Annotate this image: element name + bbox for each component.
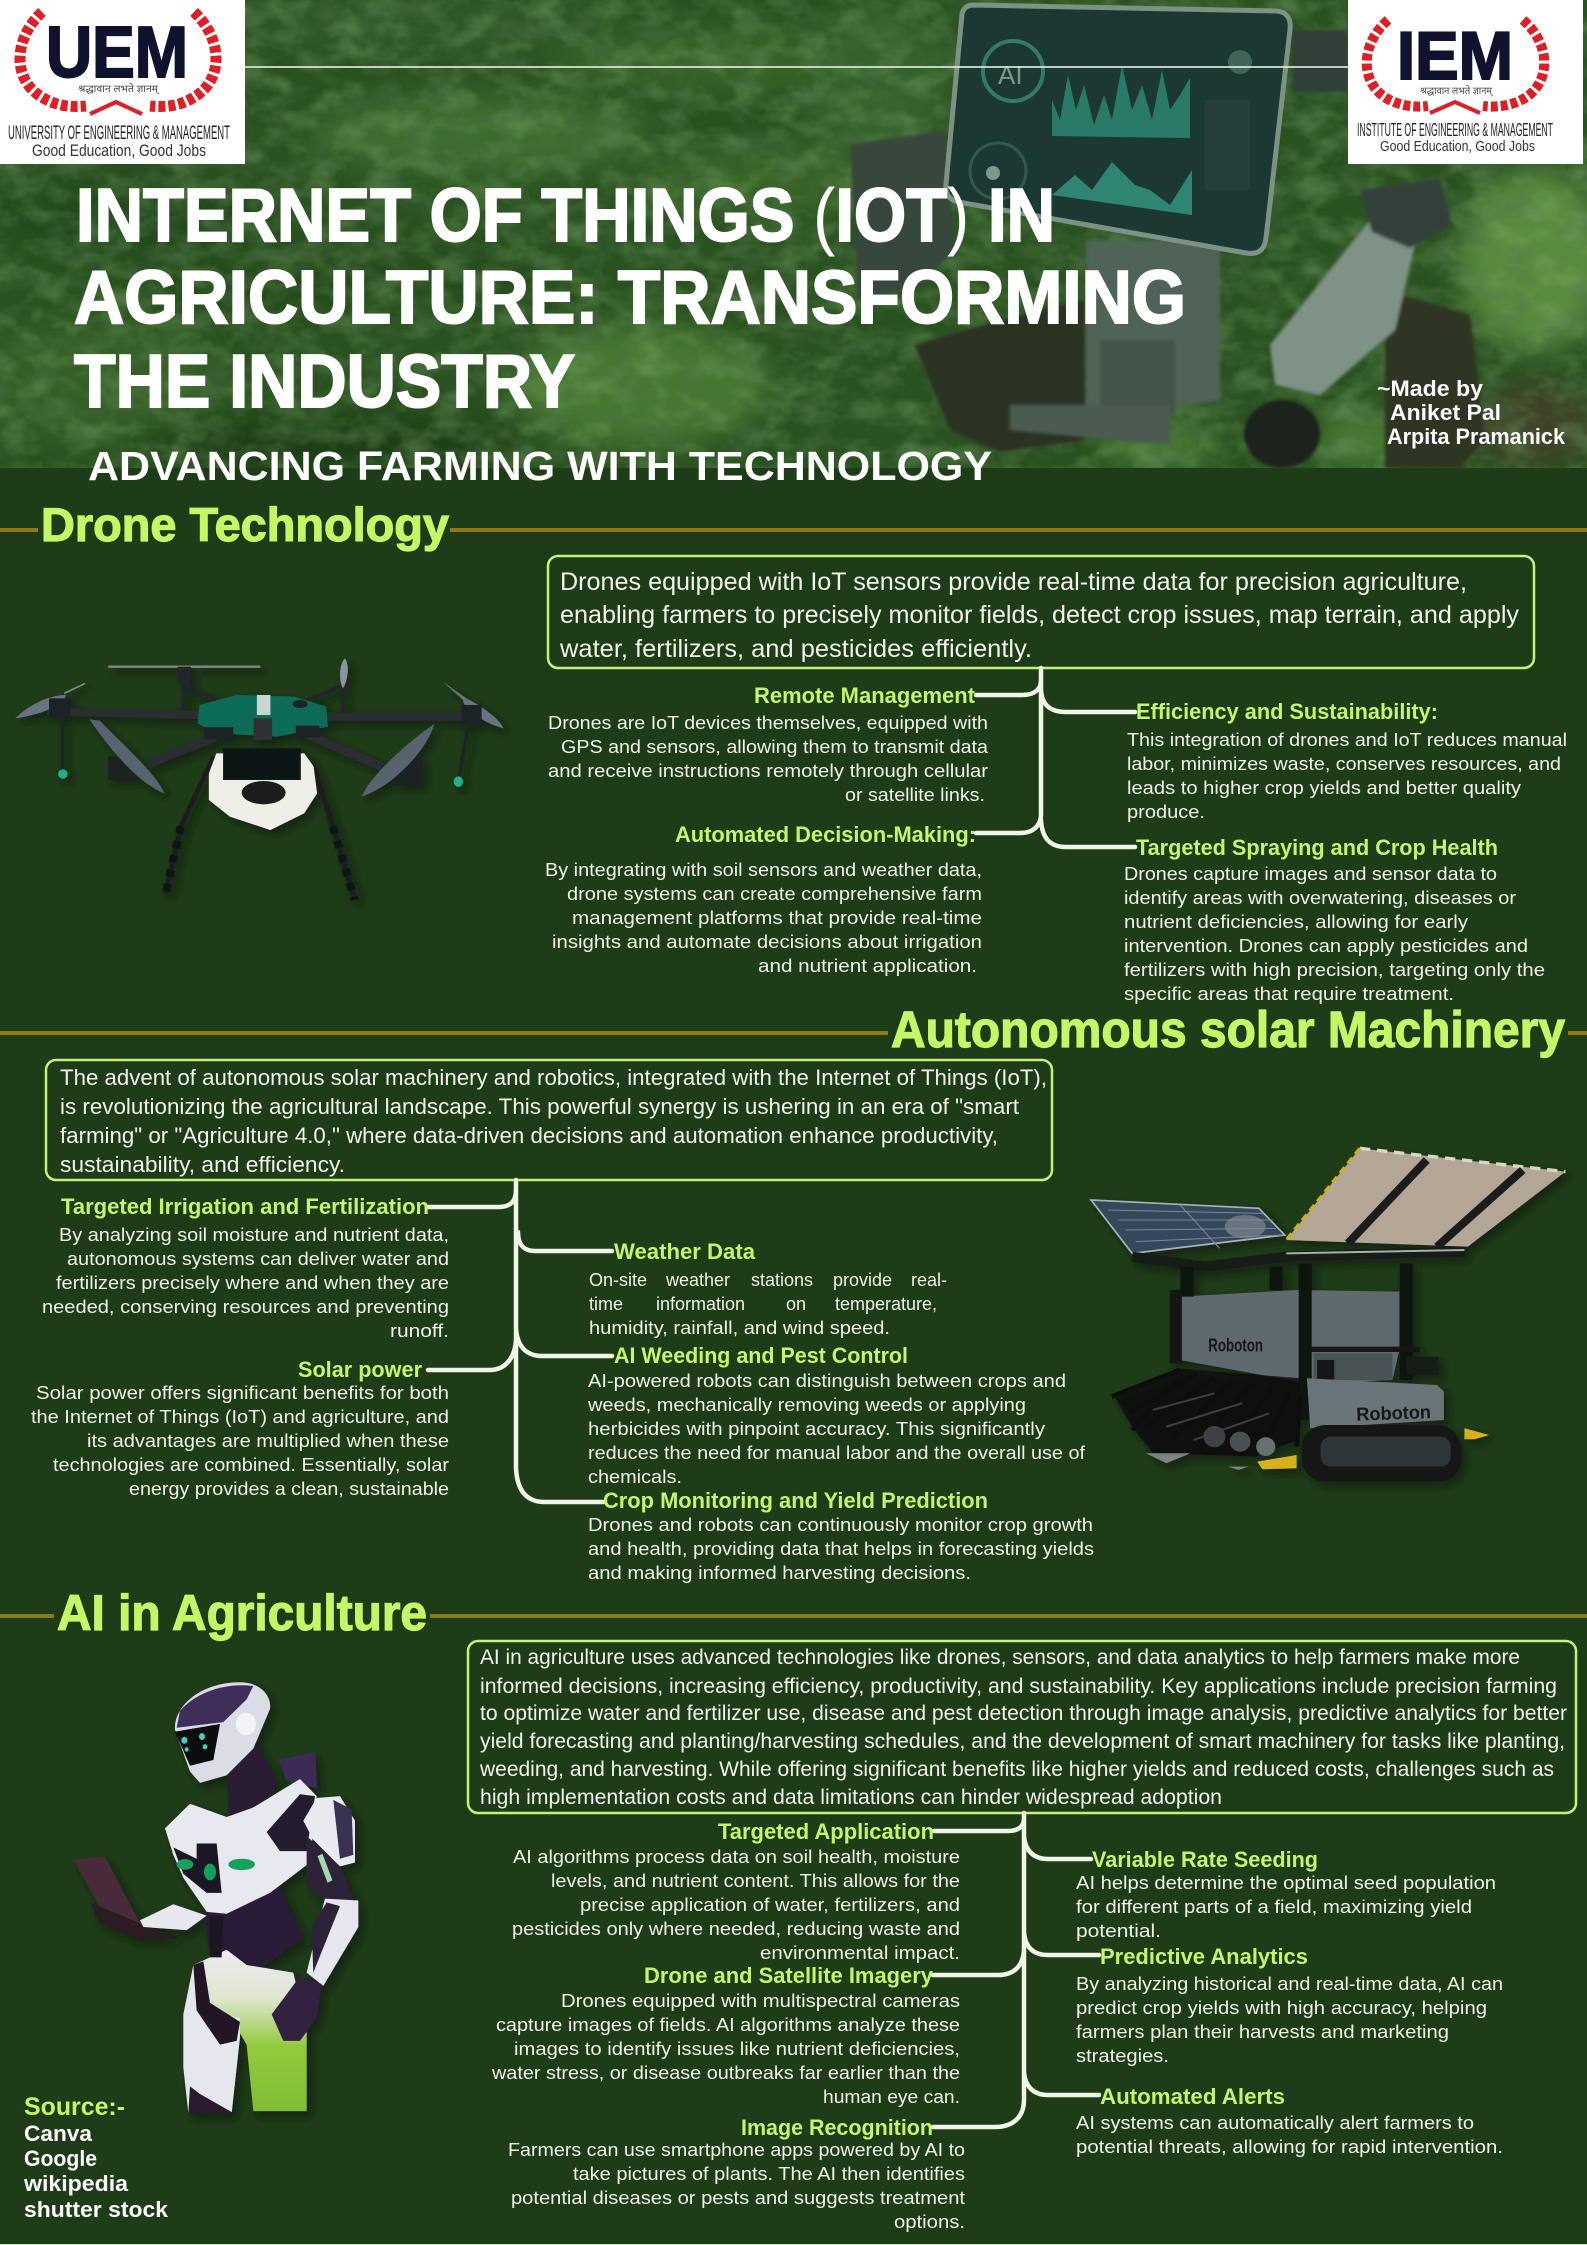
item: Variable Rate Seeding: for different parts of a field, maximizing yield <box>1076 1897 1472 1917</box>
item: Weather Data: humidity, rainfall, and wind speed. <box>589 1318 890 1338</box>
connector tree: autonomous <box>428 1180 612 1502</box>
section heading: Drone Technology: Drone Technology <box>41 498 449 551</box>
item: Targeted Application <box>512 1819 960 1963</box>
item: Predictive Analytics: farmers plan their harvests and marketing <box>1076 2022 1449 2042</box>
title <box>74 173 1186 423</box>
item: Targeted Application: precise application of water, fertilizers, and <box>580 1895 960 1915</box>
item: Variable Rate Seeding <box>1076 1847 1496 1941</box>
title: INTERNET OF THINGS (IOT) IN <box>76 173 1055 257</box>
item: Targeted Irrigation and Fertilization: autonomous systems can deliver water and <box>67 1249 449 1269</box>
panel: drone intro: enabling farmers to precisely monitor fields, detect crop issues, map terrain, and apply <box>560 601 1519 629</box>
item: Predictive Analytics: By analyzing historical and real-time data, AI can <box>1076 1974 1503 1994</box>
UEM logo: Good Education, Good Jobs <box>32 141 206 160</box>
item: Solar power: its advantages are multiplied when these <box>87 1431 449 1451</box>
item: AI Weeding and Pest Control: weeds, mechanically removing weeds or applying <box>587 1395 1026 1415</box>
item: Automated Decision-Making: Automated Decision-Making: <box>675 822 976 847</box>
item: Weather Data <box>589 1239 947 1338</box>
item: Automated Alerts: Automated Alerts <box>1100 2084 1285 2109</box>
item: Remote Management <box>548 683 989 805</box>
panel: AI intro <box>468 1641 1576 1813</box>
item: Targeted Spraying and Crop Health: intervention. Drones can apply pesticides and <box>1124 936 1528 956</box>
item: Predictive Analytics: Predictive Analytics <box>1100 1944 1308 1969</box>
IEM logo: Good Education, Good Jobs <box>1380 138 1535 155</box>
sources list: wikipedia <box>23 2171 129 2196</box>
item: Remote Management: GPS and sensors, allowing them to transmit data <box>561 737 989 757</box>
item: Targeted Spraying and Crop Health: nutrient deficiencies, allowing for early <box>1124 912 1468 932</box>
item: Automated Decision-Making: drone systems can create comprehensive farm <box>567 884 982 904</box>
item: Variable Rate Seeding: AI helps determine the optimal seed population <box>1076 1873 1496 1893</box>
connector tree: drone <box>976 668 1135 847</box>
item: AI Weeding and Pest Control: chemicals. <box>588 1467 682 1487</box>
item: Crop Monitoring and Yield Prediction: and health, providing data that helps in forecasting yields <box>588 1539 1094 1559</box>
item: Solar power <box>31 1357 449 1499</box>
authors credit <box>1377 376 1566 449</box>
item: Drone and Satellite Imagery: water stress, or disease outbreaks far earlier than the <box>491 2063 960 2083</box>
item: AI Weeding and Pest Control: AI-powered robots can distinguish between crops and <box>588 1371 1066 1391</box>
item: Automated Decision-Making: and nutrient application. <box>758 956 977 976</box>
decorative header line <box>245 66 1350 68</box>
item: Targeted Spraying and Crop Health: Targeted Spraying and Crop Health <box>1136 835 1498 860</box>
item: Targeted Spraying and Crop Health: fertilizers with high precision, targeting only the <box>1124 960 1545 980</box>
item: Solar power: Solar power <box>298 1357 422 1382</box>
item: Targeted Spraying and Crop Health: identify areas with overwatering, diseases or <box>1124 888 1516 908</box>
item: Targeted Application: AI algorithms process data on soil health, moisture <box>513 1847 960 1867</box>
item: Efficiency and Sustainability: Efficiency and Sustainability: <box>1136 699 1438 724</box>
IEM logo: श्रद्धावान लभते ज्ञानम् <box>1420 85 1494 97</box>
item: Image Recognition <box>508 2115 965 2232</box>
solar autonomous machine image: Roboton <box>1356 1402 1431 1426</box>
item: Solar power: Solar power offers significant benefits for both <box>36 1383 449 1403</box>
authors credit: Aniket Pal <box>1390 400 1501 425</box>
item: Efficiency and Sustainability: leads to higher crop yields and better quality <box>1127 778 1521 798</box>
item: Image Recognition: Farmers can use smartphone apps powered by AI to <box>508 2140 965 2160</box>
item: Weather Data: provide <box>833 1270 892 1290</box>
item: Predictive Analytics <box>1076 1944 1503 2066</box>
item: Targeted Application: Targeted Application <box>718 1819 934 1844</box>
item: Remote Management: and receive instructions remotely through cellular <box>548 761 988 781</box>
title: AGRICULTURE: TRANSFORMING <box>74 255 1186 339</box>
item: Automated Alerts: potential threats, allowing for rapid intervention. <box>1076 2137 1503 2157</box>
IEM logo <box>1348 0 1583 164</box>
item: Efficiency and Sustainability: produce. <box>1127 802 1205 822</box>
item: Targeted Irrigation and Fertilization <box>42 1194 449 1341</box>
item: Weather Data: real- <box>911 1270 947 1290</box>
item: Targeted Spraying and Crop Health: Drones capture images and sensor data to <box>1124 864 1497 884</box>
solar autonomous machine image <box>1091 1148 1565 1482</box>
item: AI Weeding and Pest Control <box>587 1343 1086 1487</box>
item: Targeted Irrigation and Fertilization: runoff. <box>390 1321 449 1341</box>
item: Targeted Application: levels, and nutrient content. This allows for the <box>551 1871 960 1891</box>
item: Solar power: technologies are combined. Essentially, solar <box>53 1455 449 1475</box>
item: Drone and Satellite Imagery: Drone and Satellite Imagery <box>644 1963 934 1988</box>
item: AI Weeding and Pest Control: AI Weeding and Pest Control <box>614 1343 908 1368</box>
sources list <box>23 2093 169 2222</box>
sources list: Canva <box>24 2121 93 2146</box>
item: Targeted Irrigation and Fertilization: By analyzing soil moisture and nutrient data, <box>59 1225 449 1245</box>
tablet dashboard in photo: AI <box>998 60 1023 90</box>
panel: AI intro: yield forecasting and planting/harvesting schedules, and the development of smart machinery for tasks like planting, <box>480 1730 1565 1753</box>
item: Targeted Application: environmental impact. <box>760 1943 960 1963</box>
item: Drone and Satellite Imagery: human eye can. <box>823 2087 960 2107</box>
panel: autonomous intro: is revolutionizing the agricultural landscape. This powerful synergy is ushering in an era of "smart <box>60 1094 1019 1119</box>
item: Targeted Application: pesticides only where needed, reducing waste and <box>512 1919 960 1939</box>
robot tracks and body in photo <box>850 30 1485 468</box>
item: AI Weeding and Pest Control: herbicides with pinpoint accuracy. This significantly <box>588 1419 1045 1439</box>
item: AI Weeding and Pest Control: reduces the need for manual labor and the overall use of <box>588 1443 1086 1463</box>
tablet dashboard in photo <box>946 5 1290 253</box>
panel: drone intro <box>548 556 1534 668</box>
item: Weather Data: Weather Data <box>614 1239 756 1264</box>
panel: AI intro: high implementation costs and data limitations can hinder widespread adoption <box>480 1786 1222 1809</box>
item: Weather Data: temperature, <box>835 1294 937 1314</box>
sources list: Source:- <box>24 2093 125 2121</box>
panel: autonomous intro: The advent of autonomous solar machinery and robotics, integrated with the Internet of Things (IoT), <box>60 1065 1047 1090</box>
panel: AI intro: informed decisions, increasing efficiency, productivity, and sustainability. Key applications include precision farming <box>480 1675 1557 1698</box>
sources list: shutter stock <box>24 2197 169 2222</box>
item: Weather Data: On-site <box>589 1270 647 1290</box>
title: THE INDUSTRY <box>74 339 575 423</box>
item: Targeted Irrigation and Fertilization: Targeted Irrigation and Fertilization <box>61 1194 429 1219</box>
panel: autonomous intro <box>46 1060 1052 1180</box>
item: Crop Monitoring and Yield Prediction: Drones and robots can continuously monitor crop growth <box>588 1515 1093 1535</box>
item: Variable Rate Seeding: potential. <box>1076 1921 1161 1941</box>
item: Crop Monitoring and Yield Prediction: Crop Monitoring and Yield Prediction <box>603 1488 988 1513</box>
item: Automated Decision-Making: By integrating with soil sensors and weather data, <box>545 860 982 880</box>
item: Image Recognition: potential diseases or pests and suggests treatment <box>511 2188 965 2208</box>
item: Automated Decision-Making <box>545 822 982 976</box>
UEM logo: UEM <box>46 13 188 93</box>
item: Efficiency and Sustainability: This integration of drones and IoT reduces manual <box>1127 730 1567 750</box>
section heading: AI in Agriculture: AI in Agriculture <box>57 1585 427 1641</box>
connector tree: AI <box>933 1813 1099 2127</box>
UEM logo <box>0 0 245 164</box>
authors credit: Arpita Pramanick <box>1387 424 1566 449</box>
item: Solar power: the Internet of Things (IoT) and agriculture, and <box>31 1407 449 1427</box>
item: Automated Alerts <box>1076 2084 1503 2157</box>
subtitle: ADVANCING FARMING WITH TECHNOLOGY <box>88 443 992 489</box>
item: Predictive Analytics: strategies. <box>1076 2046 1169 2066</box>
item: Remote Management: Remote Management <box>754 683 976 708</box>
item: Remote Management: Drones are IoT devices themselves, equipped with <box>548 713 988 733</box>
header photo: farm robot in lettuce field <box>0 0 1587 473</box>
item: Weather Data: weather <box>665 1270 730 1290</box>
panel: drone intro: water, fertilizers, and pesticides efficiently. <box>559 635 1032 663</box>
item: Targeted Irrigation and Fertilization: needed, conserving resources and preventing <box>42 1297 449 1317</box>
drone image <box>15 658 504 900</box>
item: Targeted Spraying and Crop Health: specific areas that require treatment. <box>1124 984 1454 1004</box>
IEM logo: IEM <box>1397 18 1513 94</box>
humanoid AI robot image <box>73 1682 358 2113</box>
item: Drone and Satellite Imagery: images to identify issues like nutrient deficiencies, <box>514 2039 960 2059</box>
item: Efficiency and Sustainability: labor, minimizes waste, conserves resources, and <box>1127 754 1561 774</box>
UEM logo: श्रद्धावान लभते ज्ञानम् <box>78 83 160 95</box>
panel: autonomous intro: farming" or "Agriculture 4.0," where data-driven decisions and automation enhance productivity, <box>60 1123 998 1148</box>
panel: AI intro: to optimize water and fertilizer use, disease and pest detection through image analysis, predictive analytics for better <box>480 1702 1567 1725</box>
panel: drone intro: Drones equipped with IoT sensors provide real-time data for precision agriculture, <box>560 568 1467 596</box>
item: Drone and Satellite Imagery: capture images of fields. AI algorithms analyze these <box>496 2015 960 2035</box>
item: Image Recognition: take pictures of plants. The AI then identifies <box>573 2164 965 2184</box>
item: Variable Rate Seeding: Variable Rate Seeding <box>1092 1847 1318 1872</box>
item: Automated Decision-Making: insights and automate decisions about irrigation <box>552 932 982 952</box>
authors credit: ~Made by <box>1377 376 1484 401</box>
solar autonomous machine image: Roboton <box>1208 1336 1263 1357</box>
item: Efficiency and Sustainability <box>1127 699 1567 822</box>
UEM logo: UNIVERSITY OF ENGINEERING & MANAGEMENT <box>8 123 230 144</box>
item: Image Recognition: options. <box>894 2212 965 2232</box>
item: Remote Management: or satellite links. <box>845 785 985 805</box>
item: Image Recognition: Image Recognition <box>741 2115 933 2140</box>
item: Drone and Satellite Imagery <box>491 1963 960 2107</box>
panel: autonomous intro: sustainability, and efficiency. <box>60 1152 345 1177</box>
item: Drone and Satellite Imagery: Drones equipped with multispectral cameras <box>561 1991 960 2011</box>
item: Crop Monitoring and Yield Prediction: and making informed harvesting decisions. <box>588 1563 971 1583</box>
sources list: Google <box>24 2146 97 2171</box>
item: Crop Monitoring and Yield Prediction <box>588 1488 1094 1583</box>
item: Solar power: energy provides a clean, sustainable <box>129 1479 449 1499</box>
panel: AI intro: weeding, and harvesting. While offering significant benefits like higher yields and reduced costs, challenges such as <box>479 1758 1554 1781</box>
item: Weather Data: information <box>656 1294 745 1314</box>
item: Targeted Spraying and Crop Health <box>1124 835 1545 1004</box>
panel: AI intro: AI in agriculture uses advanced technologies like drones, sensors, and data analytics to help farmers make more <box>480 1646 1520 1669</box>
item: Targeted Irrigation and Fertilization: fertilizers precisely where and when they are <box>56 1273 449 1293</box>
item: Weather Data: stations <box>751 1270 813 1290</box>
section heading: Autonomous solar Machinery: Autonomous solar Machinery <box>891 1001 1566 1058</box>
item: Automated Decision-Making: management platforms that provide real-time <box>572 908 982 928</box>
item: Weather Data: on <box>786 1294 806 1314</box>
item: Predictive Analytics: predict crop yields with high accuracy, helping <box>1076 1998 1487 2018</box>
item: Automated Alerts: AI systems can automatically alert farmers to <box>1076 2113 1474 2133</box>
item: Weather Data: time <box>589 1294 623 1314</box>
